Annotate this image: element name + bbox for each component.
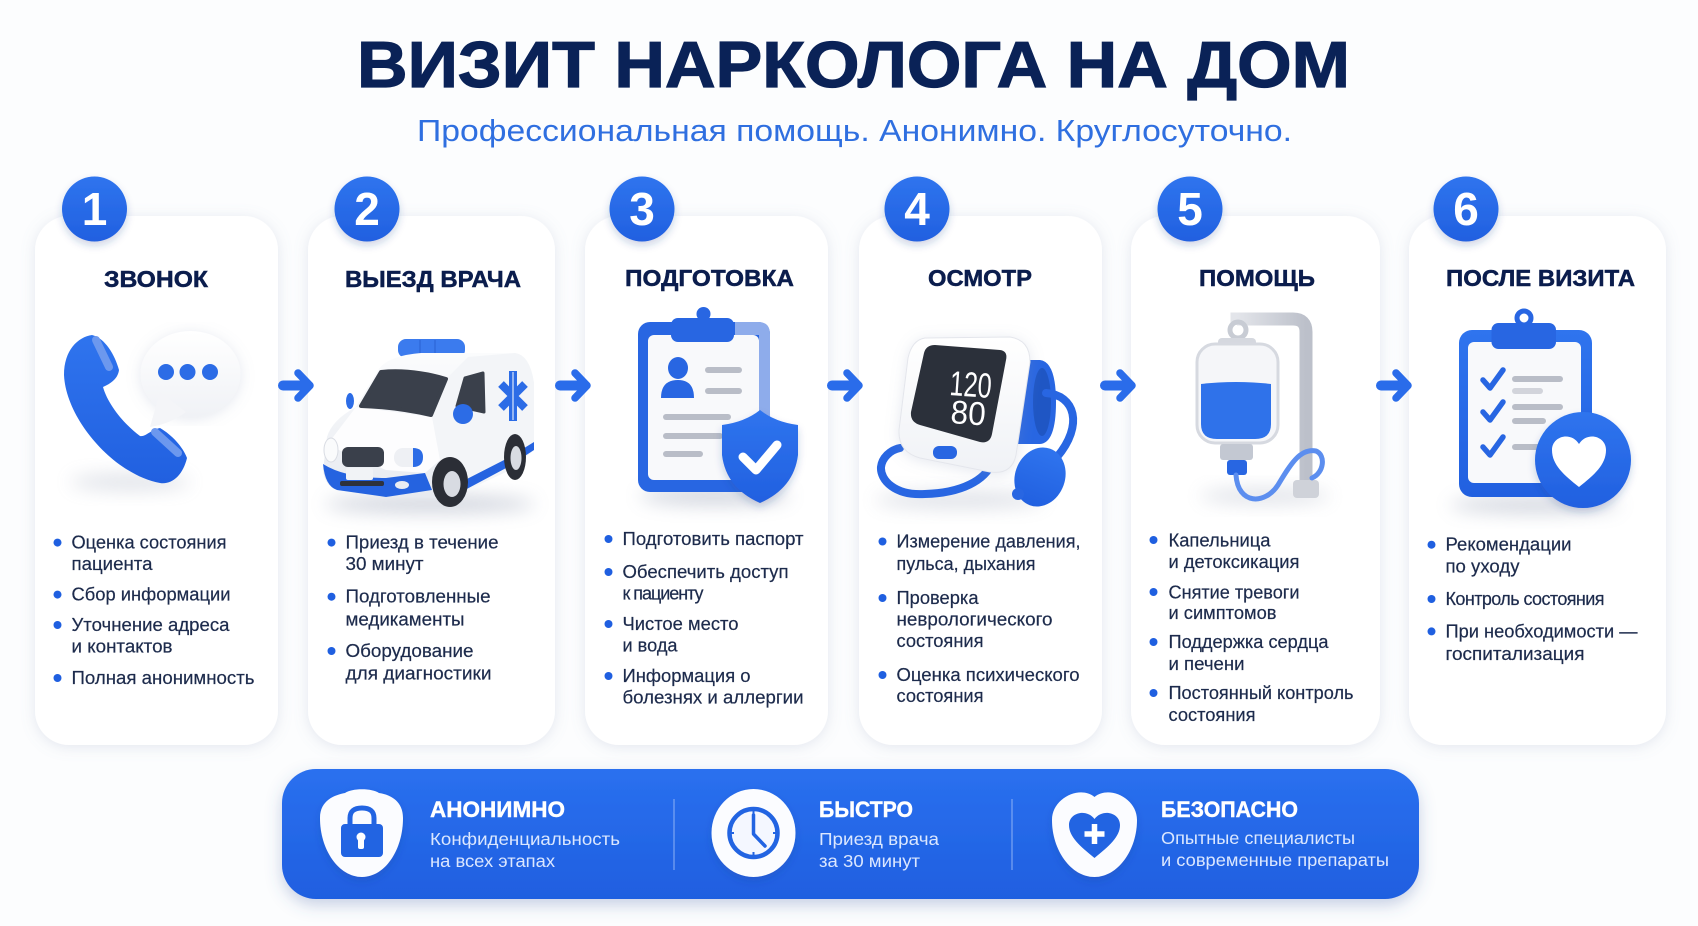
bullet list: Обеспечить доступ <box>622 562 788 582</box>
bullet list: состояния <box>896 631 984 651</box>
text: safe: БЕЗОПАСНО <box>1161 797 1298 822</box>
icon: IV drip <box>1197 319 1330 503</box>
icon: clock badge <box>712 789 796 877</box>
bullet list: состояния <box>1168 705 1256 725</box>
bullet list: Снятие тревоги <box>1168 582 1300 602</box>
bullet list: состояния <box>896 686 984 706</box>
bullet list: болезнях и аллергии <box>622 687 804 707</box>
panel: bottom benefits bar <box>282 769 1419 899</box>
text: fast: за 30 минут <box>819 851 920 871</box>
text: safe: и современные препараты <box>1161 850 1389 870</box>
title: ВИЗИТ НАРКОЛОГА НА ДОМ <box>357 28 1350 101</box>
icon: ambulance <box>323 339 535 513</box>
text: anonymous <box>430 797 620 871</box>
bullet list: Контроль состояния <box>1446 589 1604 609</box>
step number 2: 2 <box>354 183 380 235</box>
bullet list: Проверка <box>896 588 980 608</box>
step number 2 <box>334 176 400 242</box>
step number 1: 1 <box>82 183 107 235</box>
step number 6 <box>1434 176 1498 242</box>
icon: blood pressure monitor: 120 <box>948 364 993 406</box>
bullet list <box>878 532 1080 706</box>
icon: phone with speech bubble <box>64 331 240 490</box>
step number 4 <box>884 176 950 242</box>
step number 3: 3 <box>629 183 655 235</box>
text: anonymous: на всех этапах <box>430 851 555 871</box>
arrow 4 to 5 <box>1105 373 1132 398</box>
bullet list: Оценка состояния <box>72 533 226 553</box>
bullet list: Оборудование <box>346 641 474 661</box>
bullet list <box>1150 530 1354 725</box>
icon: heart badge <box>1052 792 1137 877</box>
bullet list: пациента <box>72 554 154 574</box>
bullet list: Измерение давления, <box>896 532 1080 552</box>
heading: doctor departure: ВЫЕЗД ВРАЧА <box>345 266 521 292</box>
bullet list: Постоянный контроль <box>1168 683 1354 703</box>
step number 6: 6 <box>1453 183 1479 235</box>
arrow 2 to 3 <box>560 373 587 398</box>
bullet list: Приезд в течение <box>346 533 498 553</box>
bullet list <box>328 533 498 684</box>
text: anonymous: АНОНИМНО <box>430 797 565 822</box>
bullet list: медикаменты <box>346 610 464 630</box>
bullet list <box>604 529 804 707</box>
panel: step 2 doctor departure <box>308 176 555 745</box>
bullet list: Поддержка сердца <box>1168 632 1329 652</box>
bullet list: Капельница <box>1168 530 1272 550</box>
bullet list: к пациенту <box>622 584 704 604</box>
bullet list: пульса, дыхания <box>896 554 1036 574</box>
bullet list: Полная анонимность <box>72 668 255 688</box>
bullet list: и детоксикация <box>1168 552 1300 572</box>
subtitle: Профессиональная помощь. Анонимно. Круглосуточно. <box>417 113 1292 148</box>
text: anonymous: Конфиденциальность <box>430 829 620 849</box>
bullet list: по уходу <box>1446 556 1520 576</box>
heading: treatment: ПОМОЩЬ <box>1199 265 1315 291</box>
step number 3 <box>610 176 674 242</box>
bullet list: Информация о <box>622 666 750 686</box>
icon: clipboard with shield <box>638 307 798 505</box>
heading: after visit: ПОСЛЕ ВИЗИТА <box>1446 265 1635 291</box>
arrow 5 to 6 <box>1381 373 1408 398</box>
panel: step 5 treatment <box>1131 176 1380 745</box>
bullet list: Уточнение адреса <box>72 615 231 635</box>
arrow 1 to 2 <box>283 373 310 398</box>
text: safe: Опытные специалисты <box>1161 828 1355 848</box>
bullet list: неврологического <box>896 610 1052 630</box>
bullet list: Подготовленные <box>346 587 490 607</box>
text: safe <box>1161 797 1389 870</box>
panel: step 4 examination <box>859 176 1102 745</box>
step number 5: 5 <box>1177 183 1203 235</box>
icon: blood pressure monitor <box>875 337 1074 514</box>
bullet list: 30 минут <box>346 554 424 574</box>
panel: step 6 after visit <box>1409 176 1666 745</box>
heading: preparation: ПОДГОТОВКА <box>625 265 794 291</box>
bullet list: Рекомендации <box>1446 535 1572 555</box>
step number 5 <box>1158 176 1222 242</box>
heading: examination: ОСМОТР <box>928 265 1032 291</box>
step number 1 <box>62 176 127 242</box>
bullet list: госпитализация <box>1446 644 1584 664</box>
bullet list: и контактов <box>72 636 172 656</box>
text: fast <box>819 797 939 871</box>
bullet list: Чистое место <box>622 614 738 634</box>
bullet list: и печени <box>1168 654 1244 674</box>
bullet list: для диагностики <box>346 664 492 684</box>
bullet list: Сбор информации <box>72 585 230 605</box>
icon: blood pressure monitor: 80 <box>950 393 987 432</box>
heading: call: ЗВОНОК <box>104 266 209 292</box>
bullet list <box>54 533 255 688</box>
step number 4: 4 <box>904 183 930 235</box>
bullet list: Оценка психического <box>896 665 1080 685</box>
bullet list: и симптомов <box>1168 603 1276 623</box>
icon: lock badge <box>320 789 403 877</box>
arrow 3 to 4 <box>832 373 859 398</box>
panel: step 1 call <box>35 176 278 745</box>
bullet list: При необходимости — <box>1446 621 1638 641</box>
panel: step 3 preparation <box>585 176 828 745</box>
icon: checklist with heart <box>1450 311 1631 513</box>
text: fast: БЫСТРО <box>819 797 913 822</box>
bullet list <box>1428 535 1638 664</box>
bullet list: и вода <box>622 636 678 656</box>
text: fast: Приезд врача <box>819 829 939 849</box>
bullet list: Подготовить паспорт <box>622 529 804 549</box>
